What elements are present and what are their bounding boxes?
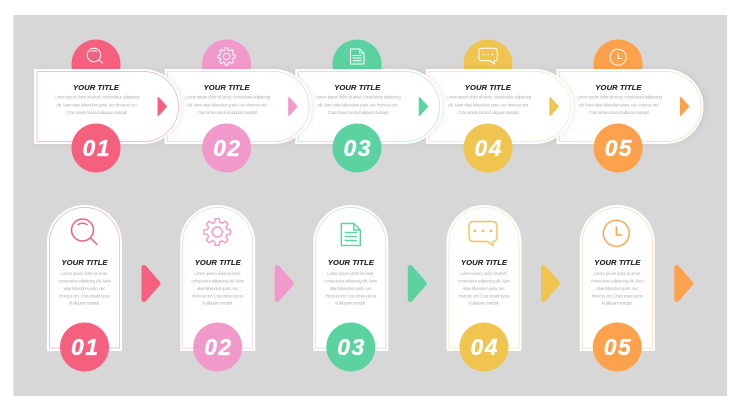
body text: Cras ornare lacus id aliquam suscipit. [328, 110, 389, 115]
body text: id aliquam suscipit. [202, 301, 233, 306]
top circle with magnifier icon [72, 40, 120, 88]
title: YOUR TITLE [73, 83, 120, 92]
body text [54, 95, 140, 115]
body text: Lorem ipsum dolor sit amet, [460, 271, 508, 276]
icon: gear [204, 219, 231, 245]
body text: Lorem ipsum dolor sit amet, consectetur adipiscing [54, 95, 140, 100]
body text: consectetur adipiscing elit. Nam [324, 278, 378, 284]
body text: rhoncus orci. Cras ornare lacus [192, 293, 243, 298]
number circle: 03 [337, 334, 365, 360]
body text: consectetur adipiscing elit. Nam [58, 278, 112, 284]
title: YOUR TITLE [594, 258, 641, 267]
body text: Lorem ipsum dolor sit amet, [61, 271, 108, 276]
card [295, 69, 442, 144]
body text [458, 271, 511, 306]
bottom step 04 [446, 205, 558, 372]
icon: clock [603, 220, 629, 246]
bottom step 01 [47, 205, 158, 372]
title: YOUR TITLE [334, 83, 381, 92]
body text: id aliquam suscipit. [468, 301, 500, 306]
body text [58, 271, 112, 306]
body text: consectetur adipiscing elit. Nam [591, 278, 644, 284]
number circle [72, 124, 120, 172]
body text: vitae bibendum justo, nec [463, 286, 505, 291]
bottom step 02 [180, 205, 291, 372]
number circle: 01 [82, 135, 110, 161]
arrow [410, 268, 424, 300]
top step 05 [556, 40, 703, 172]
arrow [544, 268, 558, 300]
number circle: 01 [71, 334, 98, 360]
number circle: 04 [474, 135, 502, 161]
title: YOUR TITLE [204, 83, 251, 92]
body text: rhoncus orci. Cras ornare lacus [592, 293, 643, 298]
body text: elit. Nam vitae bibendum justo, nec rhoncus orci. [579, 102, 660, 107]
body text: Cras ornare lacus id aliquam suscipit. [458, 110, 519, 115]
title: YOUR TITLE [595, 83, 642, 92]
body text: consectetur adipiscing elit. Nam [458, 278, 511, 284]
arch card [580, 205, 655, 351]
body text: consectetur adipiscing elit. Nam [191, 278, 245, 284]
card [426, 69, 573, 144]
number circle [193, 322, 242, 372]
number circle [460, 322, 508, 372]
body text: Lorem ipsum dolor sit amet, consectetur adipiscing [446, 95, 532, 100]
body text: Lorem ipsum dolor sit amet, consectetur adipiscing [316, 95, 401, 100]
body text: elit. Nam vitae bibendum justo, nec rhoncus orci. [187, 102, 268, 107]
body text: elit. Nam vitae bibendum justo, nec rhoncus orci. [56, 102, 138, 107]
arrow [289, 98, 297, 115]
body text: Lorem ipsum dolor sit amet, [327, 271, 374, 276]
arrow [158, 98, 166, 115]
number circle [594, 124, 643, 172]
body text [446, 95, 532, 115]
body text [191, 271, 245, 306]
arrow [677, 268, 691, 300]
body text: Cras ornare lacus id aliquam suscipit. [66, 110, 128, 115]
number circle [202, 124, 251, 172]
card [556, 69, 703, 144]
icon: magnifier [72, 219, 97, 244]
body text: rhoncus orci. Cras ornare lacus [59, 293, 110, 298]
top step 01 [34, 40, 181, 172]
body text: id aliquam suscipit. [69, 301, 100, 306]
number circle: 02 [213, 135, 240, 161]
body text: Lorem ipsum dolor sit amet, consectetur adipiscing [577, 95, 663, 100]
title: YOUR TITLE [461, 258, 508, 267]
body text: id aliquam suscipit. [335, 301, 366, 306]
icon: document [341, 224, 360, 246]
body text [577, 95, 663, 115]
top circle with gear icon [202, 40, 251, 88]
body text: rhoncus orci. Cras ornare lacus [325, 293, 376, 298]
arrow [277, 268, 291, 300]
body text: id aliquam suscipit. [602, 301, 633, 306]
body text [591, 271, 644, 306]
arrow [420, 98, 427, 115]
title: YOUR TITLE [465, 83, 512, 92]
number circle: 05 [604, 334, 632, 360]
top circle with document icon [332, 40, 382, 88]
card [165, 69, 312, 144]
number circle [593, 322, 642, 372]
body text: Cras ornare lacus id aliquam suscipit. [197, 110, 258, 115]
arch card [180, 205, 255, 351]
number circle: 05 [605, 135, 633, 161]
body text [316, 95, 401, 115]
top step 02 [165, 40, 312, 172]
arch card [446, 205, 522, 351]
number circle: 02 [204, 334, 231, 360]
title: YOUR TITLE [328, 258, 375, 267]
body text [185, 95, 271, 115]
arch card [313, 205, 388, 351]
number circle: 04 [470, 334, 498, 360]
arch card [47, 205, 122, 351]
card [34, 69, 181, 144]
body text: elit. Nam vitae bibendum justo, nec rhoncus orci. [448, 102, 529, 107]
top circle with clock icon [594, 40, 643, 88]
body text [324, 271, 378, 306]
arrow [681, 98, 689, 115]
bottom step 03 [313, 205, 424, 372]
number circle [60, 322, 109, 372]
body text: vitae bibendum justo, nec [330, 286, 372, 291]
body text: Lorem ipsum dolor sit amet, consectetur adipiscing [185, 95, 271, 100]
body text: rhoncus orci. Cras ornare lacus [458, 293, 510, 298]
body text: Lorem ipsum dolor sit amet, [594, 271, 641, 276]
title: YOUR TITLE [195, 258, 242, 267]
arrow [144, 268, 158, 300]
body text: vitae bibendum justo, nec [64, 286, 106, 291]
arrow [550, 98, 558, 115]
body text: Lorem ipsum dolor sit amet, [194, 271, 241, 276]
number circle [332, 124, 382, 172]
number circle [326, 322, 375, 372]
top circle with chat icon [464, 40, 512, 88]
number circle [464, 124, 512, 172]
bottom step 05 [580, 205, 691, 372]
top step 04 [426, 40, 573, 172]
body text: elit. Nam vitae bibendum justo, nec rhoncus orci. [318, 102, 399, 107]
body text: Cras ornare lacus id aliquam suscipit. [589, 110, 650, 115]
title: YOUR TITLE [62, 258, 108, 267]
number circle: 03 [344, 135, 371, 161]
top step 03 [295, 40, 442, 172]
body text: vitae bibendum justo, nec [596, 286, 638, 291]
icon: chat bubble [469, 222, 497, 246]
body text: vitae bibendum justo, nec [197, 286, 239, 291]
